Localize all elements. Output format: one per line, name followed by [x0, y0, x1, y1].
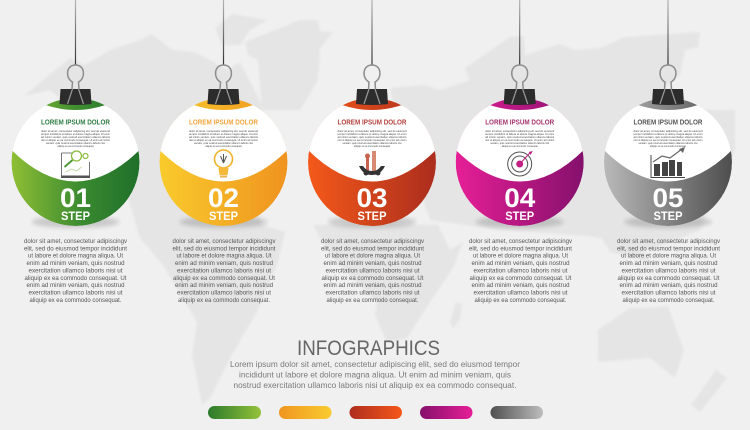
small text: tempor incididunt ut labore et dolore magna aliqua. Ut enim	[485, 132, 555, 136]
small text: ad minim veniam, quis nostrud exercitation ullamco laboris	[485, 135, 555, 139]
step label: STEP	[209, 209, 238, 223]
small text: aliquip ex ea commodo consequat	[58, 144, 94, 148]
step label: STEP	[61, 209, 90, 223]
number: 03	[357, 183, 387, 213]
small text: aliquip ex ea commodo consequat	[206, 144, 242, 148]
step label: STEP	[505, 209, 534, 223]
icon: tools and gear	[359, 151, 385, 176]
description 3: enim ad minim veniam, quis nostrud	[324, 261, 421, 267]
description 2: enim ad minim veniam, quis nostrud	[175, 283, 273, 289]
small text: dolor sit amet, consectetur adipiscing elit, sed do eiusmod	[485, 129, 554, 133]
heading: LOREM IPSUM DOLOR	[634, 120, 702, 126]
description 2: elit, sed do eiusmod tempor incididunt	[172, 246, 276, 252]
description 1: enim ad minim veniam, quis nostrud	[27, 283, 124, 289]
heading: LOREM IPSUM DOLOR	[338, 120, 406, 126]
description 4: enim ad minim veniam, quis nostrud	[472, 283, 569, 289]
description 2: dolor sit amet, consectetur adipiscingv	[172, 239, 276, 245]
small text: ad minim veniam, quis nostrud exercitation ullamco laboris	[634, 135, 703, 139]
description 3: dolor sit amet, consectetur adipiscingv	[321, 239, 424, 245]
description 4: exercitation ullamco laboris nisi ut	[474, 268, 568, 274]
description 4: enim ad minim veniam, quis nostrud	[472, 261, 569, 267]
step 4 ball	[454, 0, 586, 228]
description 1: enim ad minim veniam, quis nostrud	[27, 261, 124, 267]
description 1: dolor sit amet, consectetur adipiscingv	[24, 239, 127, 245]
description 2: aliquip ex ea commodo consequat.	[178, 298, 270, 304]
description 4: elit, sed do eiusmod tempor incididunt	[469, 246, 572, 252]
description 5: enim ad minim veniam, quis nostrud	[620, 283, 717, 289]
step 3 ball	[306, 0, 438, 228]
description 3: exercitation ullamco laboris nisi ut	[326, 268, 420, 274]
small text: nisi ut aliquip ex ea commodo consequat. Ut enim ad minim	[338, 138, 407, 142]
small text: tempor incididunt ut labore et dolore magna aliqua. Ut enim	[634, 132, 703, 136]
small text: nisi ut aliquip ex ea commodo consequat. Ut enim ad minim	[189, 138, 258, 142]
small text: dolor sit amet, consectetur adipiscing elit, sed do eiusmod	[41, 129, 110, 133]
description 3: aliquip ex ea commodo consequat.	[326, 298, 419, 304]
description 5	[617, 239, 720, 304]
small text: ad minim veniam, quis nostrud exercitation ullamco laboris	[41, 135, 110, 139]
small text: nisi ut aliquip ex ea commodo consequat. Ut enim ad minim	[634, 138, 703, 142]
ball shadow	[180, 216, 268, 228]
ball body	[306, 92, 438, 226]
description 4: aliquip ex ea commodo consequat. Ut	[469, 276, 572, 282]
description 3: aliquip ex ea commodo consequat. Ut	[321, 276, 424, 282]
step 1 ball	[10, 0, 142, 228]
icon: chart with magnifier	[61, 151, 90, 178]
ball body	[602, 92, 734, 226]
icon: target	[508, 151, 533, 176]
legend pills	[208, 406, 543, 419]
ball shadow	[476, 216, 564, 228]
small text	[189, 129, 258, 148]
ball body	[454, 92, 586, 226]
description 1: exercitation ullamco laboris nisi ut	[28, 291, 123, 297]
description 5: aliquip ex ea commodo consequat.	[622, 298, 715, 304]
intro text: incididunt ut labore et dolore magna aliqua. Ut enim ad minim veniam, quis	[239, 370, 511, 380]
description 4: exercitation ullamco laboris nisi ut	[474, 291, 568, 297]
description 3: elit, sed do eiusmod tempor incididunt	[321, 246, 424, 252]
small text: tempor incididunt ut labore et dolore magna aliqua. Ut enim	[41, 132, 110, 136]
description 5: ut labore et dolore magna aliqua. Ut	[621, 254, 716, 260]
icon: bar chart with arrow	[651, 147, 685, 178]
description 1: exercitation ullamco laboris nisi ut	[28, 268, 123, 274]
binder clip	[504, 0, 536, 105]
heading: LOREM IPSUM DOLOR	[189, 120, 258, 126]
small text: aliquip ex ea commodo consequat	[650, 144, 686, 148]
description 4: dolor sit amet, consectetur adipiscingv	[469, 239, 572, 245]
heading: LOREM IPSUM DOLOR	[485, 120, 554, 126]
small text: tempor incididunt ut labore et dolore magna aliqua. Ut enim	[338, 132, 407, 136]
description 3: exercitation ullamco laboris nisi ut	[326, 291, 420, 297]
description 1: elit, sed do eiusmod tempor incididunt	[24, 246, 127, 252]
step 5 ball	[602, 0, 734, 228]
small text: ad minim veniam, quis nostrud exercitation ullamco laboris	[338, 135, 407, 139]
number: 02	[208, 183, 239, 213]
description 3: ut labore et dolore magna aliqua. Ut	[325, 254, 420, 260]
description 1	[24, 239, 127, 304]
ball shadow	[32, 216, 120, 228]
small text	[634, 129, 703, 148]
small text: nisi ut aliquip ex ea commodo consequat. Ut enim ad minim	[41, 138, 110, 142]
description 5: exercitation ullamco laboris nisi ut	[622, 268, 716, 274]
step label: STEP	[358, 209, 386, 223]
small text	[338, 129, 407, 148]
description 4	[469, 239, 572, 304]
description 4: aliquip ex ea commodo consequat.	[474, 298, 567, 304]
description 5: enim ad minim veniam, quis nostrud	[620, 261, 717, 267]
intro text	[230, 359, 520, 390]
ball body	[10, 92, 142, 226]
number: 01	[60, 183, 91, 213]
number: 05	[653, 183, 683, 213]
description 2: aliquip ex ea commodo consequat. Ut	[173, 276, 275, 282]
small text: dolor sit amet, consectetur adipiscing elit, sed do eiusmod	[634, 129, 703, 133]
small text: veniam, quis nostrud exercitation ullamco laboris nisi	[46, 141, 105, 145]
step label: STEP	[654, 209, 682, 223]
binder clip	[356, 0, 388, 105]
description 2: enim ad minim veniam, quis nostrud	[175, 261, 273, 267]
small text	[41, 129, 110, 148]
description 5: exercitation ullamco laboris nisi ut	[622, 291, 716, 297]
intro text: Lorem ipsum dolor sit amet, consectetur adipiscing elit, sed do eiusmod tempor	[230, 359, 520, 369]
small text: veniam, quis nostrud exercitation ullamco laboris nisi	[194, 141, 253, 145]
binder clip	[652, 0, 684, 105]
small text: veniam, quis nostrud exercitation ullamco laboris nisi	[490, 141, 549, 145]
description 2: ut labore et dolore magna aliqua. Ut	[176, 254, 272, 260]
small text	[485, 129, 555, 148]
small text: dolor sit amet, consectetur adipiscing elit, sed do eiusmod	[338, 129, 407, 133]
small text: aliquip ex ea commodo consequat	[502, 144, 538, 148]
intro text: nostrud exercitation ullamco laboris nisi ut aliquip ex ea commodo consequat.	[234, 380, 516, 390]
description 5: aliquip ex ea commodo consequat. Ut	[617, 276, 720, 282]
binder clip	[208, 0, 240, 105]
small text: ad minim veniam, quis nostrud exercitation ullamco laboris	[189, 135, 258, 139]
small text: aliquip ex ea commodo consequat	[354, 144, 390, 148]
description 1: ut labore et dolore magna aliqua. Ut	[28, 254, 123, 260]
number: 04	[504, 183, 535, 213]
description 3: enim ad minim veniam, quis nostrud	[324, 283, 421, 289]
description 2: exercitation ullamco laboris nisi ut	[177, 291, 271, 297]
ball shadow	[328, 216, 416, 228]
description 2	[172, 239, 276, 304]
icon: light bulb	[214, 150, 232, 178]
ball body	[158, 92, 290, 226]
ball shadow	[624, 216, 712, 228]
small text: tempor incididunt ut labore et dolore magna aliqua. Ut enim	[189, 132, 258, 136]
description 4: ut labore et dolore magna aliqua. Ut	[473, 254, 568, 260]
description 1: aliquip ex ea commodo consequat. Ut	[24, 276, 127, 282]
description 1: aliquip ex ea commodo consequat.	[30, 298, 122, 304]
description 3	[321, 239, 424, 304]
heading: LOREM IPSUM DOLOR	[41, 120, 110, 126]
small text: veniam, quis nostrud exercitation ullamco laboris nisi	[342, 141, 402, 145]
description 5: elit, sed do eiusmod tempor incididunt	[617, 246, 720, 252]
step 2 ball	[158, 0, 290, 228]
description 2: exercitation ullamco laboris nisi ut	[177, 268, 271, 274]
small text: nisi ut aliquip ex ea commodo consequat. Ut enim ad minim	[485, 138, 555, 142]
title: INFOGRAPHICS	[297, 337, 440, 360]
binder clip	[60, 0, 92, 105]
description 5: dolor sit amet, consectetur adipiscingv	[617, 239, 720, 245]
small text: dolor sit amet, consectetur adipiscing elit, sed do eiusmod	[189, 129, 258, 133]
small text: veniam, quis nostrud exercitation ullamco laboris nisi	[638, 141, 698, 145]
